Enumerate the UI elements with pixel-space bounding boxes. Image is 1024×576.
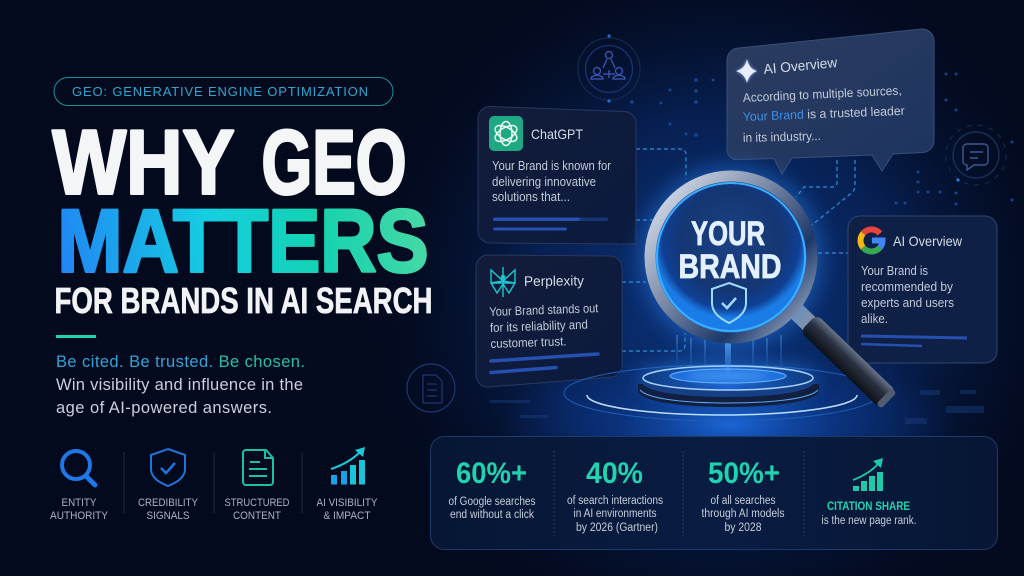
pillar: structured content: STRUCTURED: [224, 497, 290, 509]
card: Perplexity: for its reliability and: [490, 318, 588, 335]
stat: 40%: 40%: [586, 457, 643, 490]
pillar: credibility signals: [138, 449, 199, 522]
decorative dots: [630, 72, 1014, 206]
lens label: YOUR: [691, 215, 765, 253]
pillar: entity authority: [50, 451, 109, 522]
card: AI Overview bubble: According to multiple sources,: [742, 84, 902, 105]
card: AI Overview bubble: in its industry...: [743, 129, 821, 145]
icon: lens shield: [712, 283, 746, 323]
title: WHY: [52, 112, 234, 214]
title: [52, 112, 432, 321]
card: Google AI Overview: recommended by: [861, 280, 954, 294]
light beam: [676, 335, 782, 376]
card: Google AI Overview: alike.: [861, 312, 888, 326]
lens label: BRAND: [678, 248, 782, 286]
icon: sparkle: [736, 59, 757, 83]
icon: document circle: [407, 364, 455, 412]
icon: document: [243, 450, 273, 485]
card: Perplexity: Perplexity: [524, 272, 584, 289]
citation share: is the new page rank.: [822, 515, 916, 527]
eyebrow pill: GEO: GENERATIVE ENGINE OPTIMIZATION: [72, 84, 368, 99]
stat: 50%: [702, 457, 785, 534]
magnifying glass: [639, 165, 897, 409]
stat: 60%: end without a click: [450, 509, 534, 521]
card: AI Overview bubble: AI Overview: [763, 54, 839, 77]
tagline: Be cited. Be trusted. Be chosen.: [56, 353, 305, 371]
card: Perplexity: Your Brand stands out: [489, 301, 599, 319]
pillar: structured content: [224, 450, 290, 522]
stat: 60%: of Google searches: [448, 496, 536, 508]
tagline: age of AI-powered answers.: [56, 399, 272, 417]
stat: 40%: of search interactions: [567, 495, 663, 507]
card: Perplexity: customer trust.: [490, 334, 567, 351]
stats panel: [430, 436, 998, 550]
platform: [564, 362, 880, 421]
citation share: CITATION SHARE: [827, 499, 910, 513]
handle: [786, 300, 897, 409]
card: Perplexity: [476, 255, 622, 387]
card: Google AI Overview: AI Overview: [893, 233, 963, 249]
card: AI Overview bubble: Your Brand is a trusted leader: [743, 104, 905, 124]
card: ChatGPT: solutions that...: [492, 190, 570, 204]
pillar: entity authority: AUTHORITY: [50, 510, 109, 522]
stat: 40%: [567, 457, 663, 534]
card: ChatGPT: [478, 106, 636, 244]
pillar: AI visibility: & IMPACT: [324, 510, 371, 522]
card: Google AI Overview: Your Brand is: [861, 264, 928, 278]
icon: people network: [578, 34, 640, 103]
title: FOR BRANDS IN AI SEARCH: [54, 280, 432, 321]
card: ChatGPT: delivering innovative: [492, 175, 596, 189]
citation share: [822, 458, 916, 527]
pillar: AI visibility: AI VISIBILITY: [316, 497, 378, 509]
icon: ChatGPT logo: [489, 116, 523, 151]
icon: growth chart: [331, 447, 365, 484]
pillar: entity authority: ENTITY: [62, 497, 97, 509]
icon: magnifier: [62, 451, 95, 485]
accent line: [56, 335, 96, 338]
stat: 40%: by 2026 (Gartner): [576, 522, 658, 534]
title: MATTERS: [58, 190, 428, 290]
card: ChatGPT: Your Brand is known for: [492, 159, 611, 173]
card: Google AI Overview: experts and users: [861, 296, 954, 310]
icon: chat bubble: [946, 125, 1006, 185]
stat: 50%: 50%+: [708, 457, 780, 490]
pillar: structured content: CONTENT: [233, 510, 281, 522]
icon: shield: [151, 449, 185, 486]
card: ChatGPT: ChatGPT: [531, 126, 583, 142]
stat: 50%: through AI models: [702, 508, 785, 520]
stat: 60%: 60%+: [456, 457, 527, 490]
card: Google AI Overview: [848, 216, 997, 363]
tagline: [56, 353, 305, 417]
tagline: Win visibility and influence in the: [56, 376, 303, 394]
pillar: credibility signals: CREDIBILITY: [138, 497, 199, 509]
icon: teal chart: [853, 458, 883, 491]
pillar: AI visibility: [316, 447, 378, 522]
stat: 40%: in AI environments: [574, 508, 657, 520]
stat: 50%: of all searches: [710, 495, 776, 507]
icon: Google G: [861, 230, 882, 251]
title: GEO: [262, 112, 406, 214]
stat: 50%: by 2028: [724, 522, 762, 534]
icon: Perplexity logo: [491, 267, 515, 297]
pillar: credibility signals: SIGNALS: [146, 510, 190, 522]
lens label: [678, 215, 782, 286]
connectors: [622, 149, 855, 351]
eyebrow pill: [54, 78, 393, 106]
card: AI Overview bubble: [727, 29, 934, 174]
stat: 60%: [448, 457, 536, 521]
